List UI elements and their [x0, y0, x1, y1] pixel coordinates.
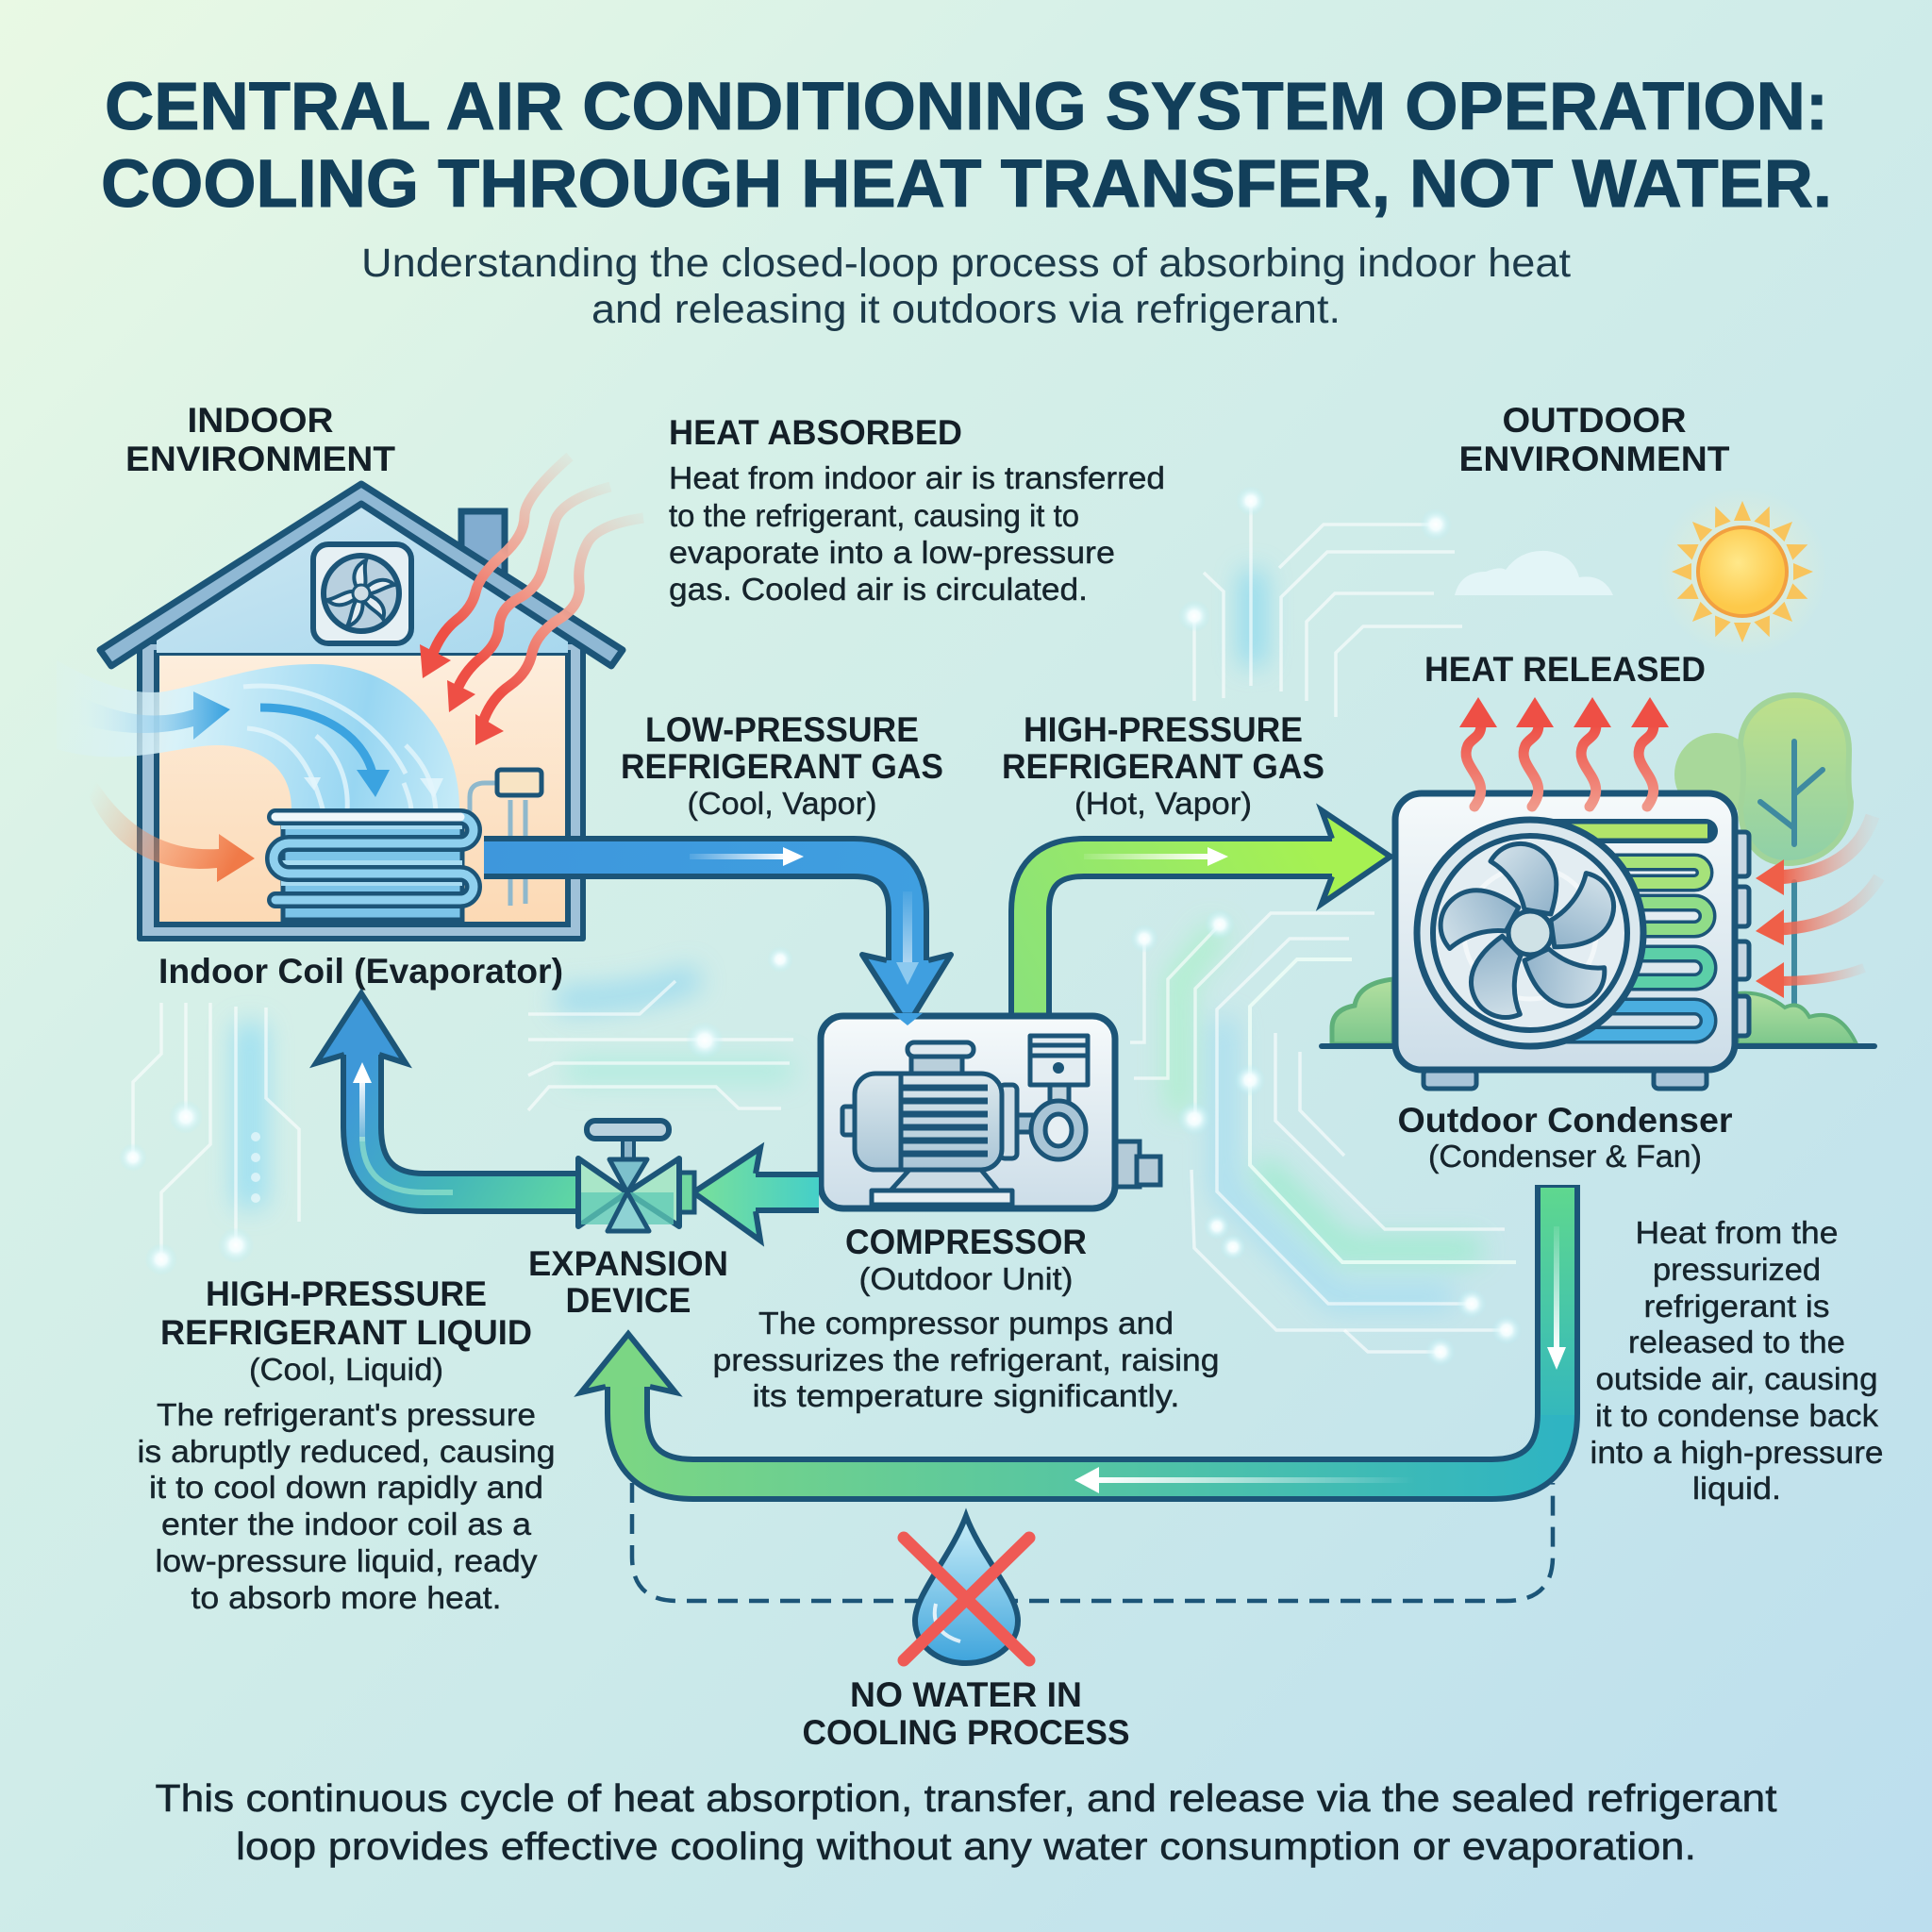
label: low-pressure refrigerant gas: REFRIGERANT GAS [621, 747, 943, 786]
arrows: heat entering house [420, 457, 643, 745]
attic [157, 506, 568, 653]
text: compressor: pressurizes the refrigerant, raising [713, 1342, 1219, 1377]
text: high-pressure refrigerant liquid: REFRIGERANT LIQUID [160, 1313, 532, 1352]
light stream on bend [362, 1137, 453, 1192]
compressor [821, 1013, 1160, 1208]
pipe: condenser to expansion device [581, 1185, 1566, 1493]
fan [1417, 820, 1643, 1046]
pipe: high-pressure green line [1030, 810, 1391, 1017]
outdoor condenser unit [1395, 793, 1749, 1089]
light flow arrow [896, 891, 919, 985]
heading: outdoor environment [1458, 401, 1730, 478]
heading: indoor environment: ENVIRONMENT [125, 440, 395, 478]
icon: tree [1674, 695, 1851, 1015]
footer summary: This continuous cycle of heat absorption, transfer, and release via the sealed refrigerant [155, 1776, 1777, 1820]
text: heat absorbed: HEAT ABSORBED [669, 413, 962, 452]
stream streaks [243, 686, 436, 821]
footer summary: loop provides effective cooling without any water consumption or evaporation. [236, 1824, 1696, 1868]
text: heat absorbed: Heat from indoor air is transferred [669, 460, 1165, 495]
icon: bushes and ground [1322, 979, 1874, 1046]
right stub [1113, 1141, 1160, 1187]
text: compressor: (Outdoor Unit) [858, 1261, 1074, 1296]
house illustration [57, 484, 623, 939]
arrow: incoming air [80, 691, 230, 740]
text: high-pressure refrigerant liquid: is abruptly reduced, causing [138, 1434, 555, 1469]
text: heat absorbed: gas. Cooled air is circulated. [669, 572, 1088, 607]
cabinet [1395, 793, 1735, 1070]
heading: indoor environment [125, 401, 395, 478]
decorative circuit background [119, 486, 1522, 1367]
text: heat absorbed: to the refrigerant, causing it to [669, 498, 1079, 533]
title: CENTRAL AIR CONDITIONING SYSTEM OPERATION: [105, 70, 1828, 144]
text: expansion device: DEVICE [566, 1281, 691, 1320]
arrows: heat rising from condenser [1459, 697, 1669, 807]
arrows: outside air entering condenser [1756, 816, 1879, 998]
thermostat and wiring [470, 770, 541, 906]
text: condenser description: pressurized [1653, 1252, 1821, 1287]
text: expansion device [528, 1244, 728, 1320]
text: high-pressure refrigerant liquid: enter the indoor coil as a [161, 1507, 532, 1541]
condenser coils [1509, 831, 1708, 1035]
text: condenser description: it to condense back [1595, 1398, 1879, 1433]
arrow tip overlap [892, 1013, 923, 1025]
dashed no-water link [632, 1483, 1553, 1601]
subtitle: and releasing it outdoors via refrigerant. [591, 287, 1341, 332]
label: high-pressure refrigerant gas: REFRIGERANT GAS [1002, 747, 1324, 786]
pipe: expansion device to indoor coil [316, 993, 585, 1192]
text: high-pressure refrigerant liquid: low-pressure liquid, ready [155, 1543, 538, 1578]
heading: outdoor environment: ENVIRONMENT [1458, 440, 1730, 478]
white flow arrow [690, 847, 804, 866]
icon: water drop crossed out [904, 1516, 1029, 1663]
heading: indoor environment: INDOOR [187, 401, 334, 440]
text: outdoor condenser label: Outdoor Condenser [1398, 1101, 1732, 1140]
piston [1030, 1036, 1088, 1159]
text: heat absorbed: evaporate into a low-pressure [669, 535, 1115, 570]
text: high-pressure refrigerant liquid [138, 1274, 555, 1615]
white flow arrow [1084, 847, 1228, 866]
title: COOLING THROUGH HEAT TRANSFER, NOT WATER. [101, 147, 1832, 222]
text: high-pressure refrigerant liquid: it to cool down rapidly and [149, 1470, 543, 1505]
arrow: warm air [85, 778, 255, 882]
text: heat released: HEAT RELEASED [1424, 650, 1706, 689]
pipe: compressor to expansion device [693, 1148, 819, 1241]
text: condenser description: released to the [1628, 1324, 1845, 1359]
label: low-pressure refrigerant gas: (Cool, Vapor) [687, 786, 877, 821]
text: high-pressure refrigerant liquid: to absorb more heat. [191, 1580, 502, 1615]
label: high-pressure refrigerant gas: HIGH-PRESSURE [1024, 710, 1303, 749]
air stream swoosh [57, 660, 459, 808]
arrow: light streaks [304, 777, 443, 798]
icon: sun [1657, 487, 1827, 657]
white flow arrow down [1547, 1226, 1566, 1370]
text: condenser description: Heat from the [1636, 1215, 1838, 1250]
pipe: low-pressure blue line [484, 847, 951, 1025]
subtitle: Understanding the closed-loop process of absorbing indoor heat [361, 241, 1571, 286]
label: low-pressure refrigerant gas [621, 710, 943, 821]
text: no water: COOLING PROCESS [802, 1713, 1130, 1752]
text: compressor [713, 1223, 1219, 1413]
text: high-pressure refrigerant liquid: HIGH-PRESSURE [206, 1274, 487, 1313]
white flow arrow left [1074, 1467, 1415, 1493]
text: condenser description: liquid. [1692, 1471, 1781, 1506]
roof [100, 484, 623, 666]
text: compressor: its temperature significantly. [753, 1378, 1179, 1413]
text: condenser description: outside air, causing [1596, 1361, 1877, 1396]
text: no water [802, 1675, 1130, 1752]
text: condenser description: into a high-pressure [1591, 1435, 1883, 1470]
house walls [140, 641, 583, 939]
text: no water: NO WATER IN [850, 1675, 1082, 1714]
side tabs [1734, 832, 1749, 1036]
label: high-pressure refrigerant gas: (Hot, Vapor) [1074, 786, 1252, 821]
footer summary [155, 1776, 1777, 1868]
icon: cloud [1455, 551, 1613, 595]
text: condenser description [1591, 1215, 1883, 1506]
attic fan [313, 544, 411, 643]
title [101, 70, 1832, 222]
subtitle [361, 241, 1571, 332]
text: heat absorbed [669, 413, 1165, 607]
white flow arrow [353, 1062, 372, 1141]
motor [842, 1042, 1041, 1205]
text: compressor: The compressor pumps and [758, 1306, 1174, 1341]
icon: expansion valve [578, 1121, 694, 1231]
text: condenser description: refrigerant is [1643, 1289, 1830, 1324]
interior [157, 653, 568, 924]
text: compressor: COMPRESSOR [845, 1223, 1087, 1261]
heading: outdoor environment: OUTDOOR [1502, 401, 1687, 440]
text: indoor coil label: Indoor Coil (Evaporator) [158, 952, 563, 991]
label: low-pressure refrigerant gas: LOW-PRESSURE [645, 710, 919, 749]
evaporator coil [274, 817, 474, 920]
text: high-pressure refrigerant liquid: (Cool, Liquid) [249, 1352, 443, 1387]
text: outdoor condenser label [1398, 1101, 1732, 1174]
cabinet [821, 1016, 1115, 1208]
text: expansion device: EXPANSION [528, 1244, 728, 1283]
feet [1424, 1070, 1707, 1089]
arrow: cooled air down [260, 708, 390, 797]
text: high-pressure refrigerant liquid: The refrigerant's pressure [157, 1397, 536, 1432]
label: high-pressure refrigerant gas [1002, 710, 1324, 821]
text: outdoor condenser label: (Condenser & Fan) [1428, 1139, 1702, 1174]
chimney [461, 511, 505, 604]
